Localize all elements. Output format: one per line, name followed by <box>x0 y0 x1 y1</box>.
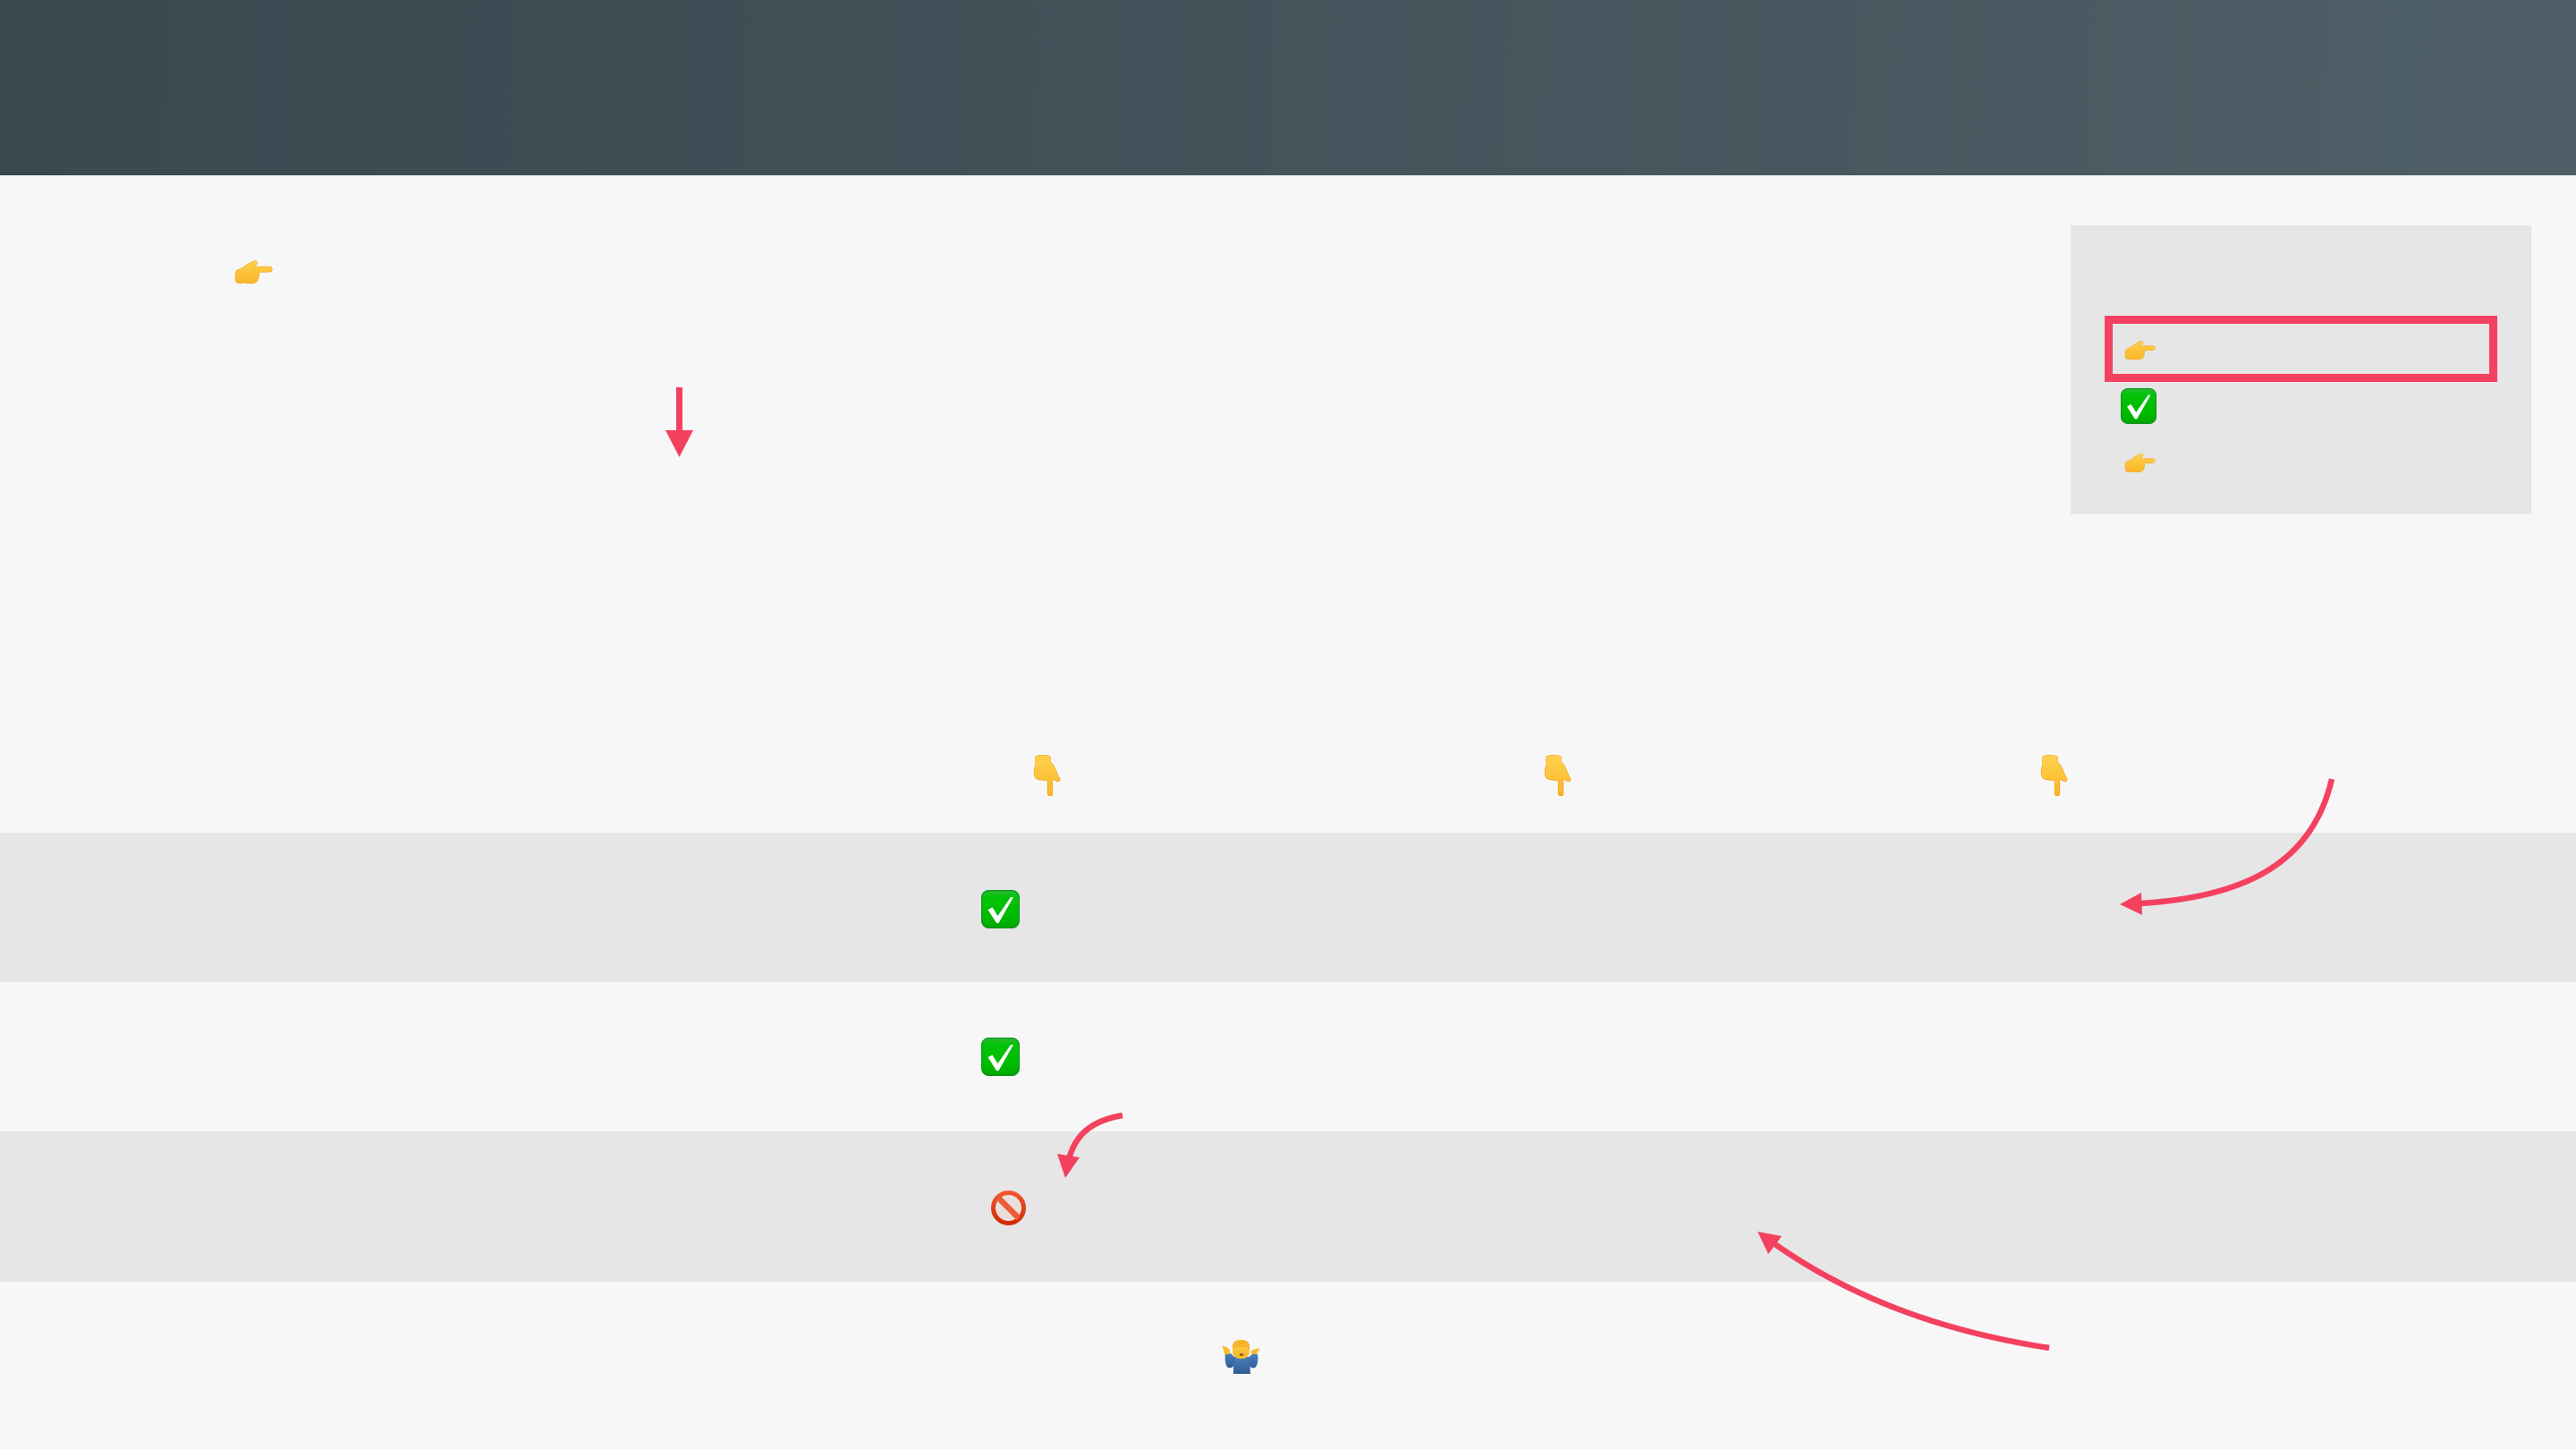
icon: pointing down hand, column 2 <box>1545 755 1571 796</box>
arrow: short curved to row 3 <box>1057 1115 1123 1178</box>
icon: prohibited sign, row 3 <box>993 1193 1023 1224</box>
icon: pointing right hand, panel item 3 <box>2125 453 2155 472</box>
icon: shrugging person <box>1222 1340 1260 1374</box>
arrow: straight down <box>665 387 693 457</box>
table row band 1 <box>0 833 2576 982</box>
arrow: curved to row 1 <box>2120 779 2332 915</box>
side panel <box>2071 225 2531 514</box>
icon: check mark, row 1 <box>982 891 1019 928</box>
icon: check mark, panel item 2 <box>2122 389 2156 423</box>
highlight box in side panel <box>2105 316 2497 382</box>
table row band 2 <box>0 1131 2576 1282</box>
icon: pointing right hand in intro <box>235 260 272 284</box>
icon: pointing down hand, column 3 <box>2041 755 2067 796</box>
header banner <box>0 0 2576 175</box>
icon: pointing down hand, column 1 <box>1034 755 1060 796</box>
arrow: curved up to row 3 <box>1758 1232 2049 1348</box>
icon: check mark, row 2 <box>982 1038 1019 1075</box>
icon: pointing right hand, panel item 1 <box>2125 341 2155 360</box>
